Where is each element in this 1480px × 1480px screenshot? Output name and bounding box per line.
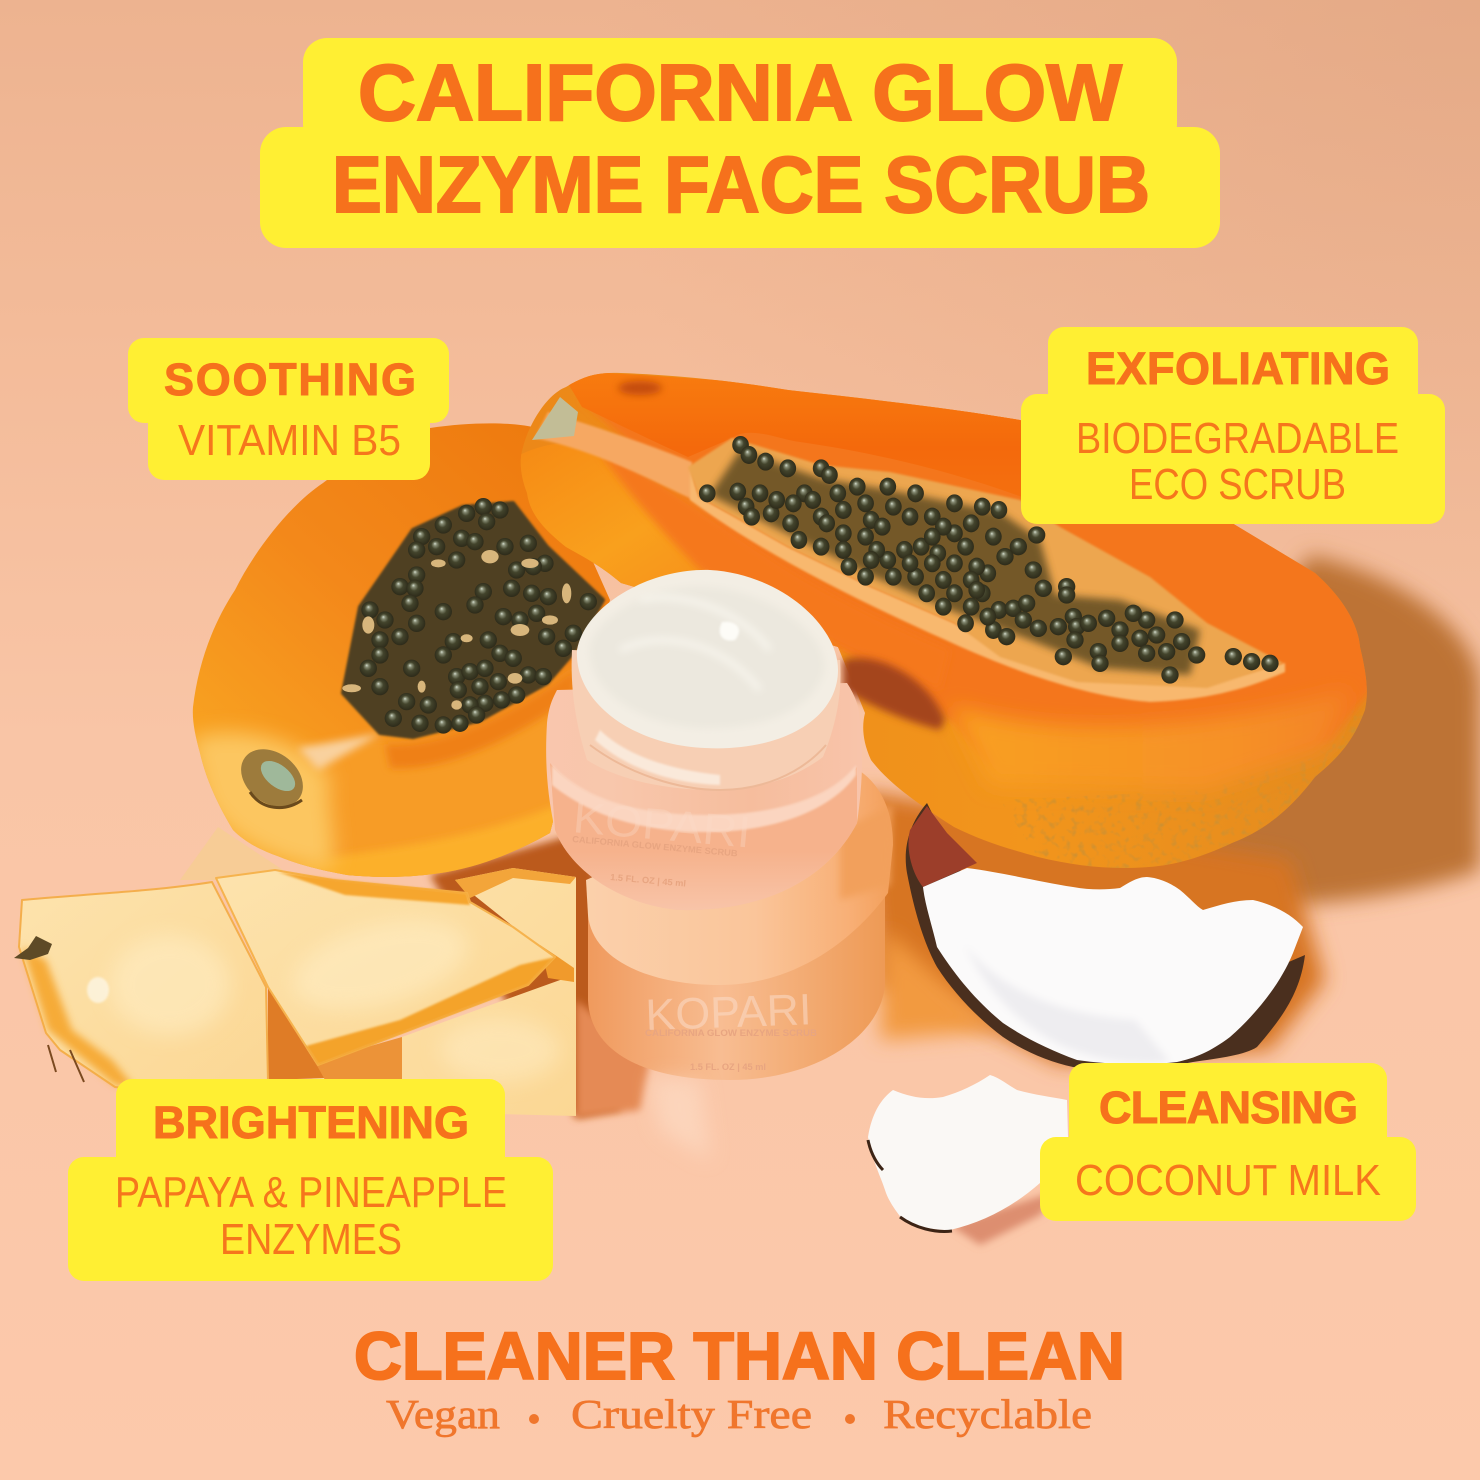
pineapple: back piece: [180, 827, 283, 880]
callout: brightening: BRIGHTENING: [153, 1097, 469, 1148]
right papaya half: [515, 370, 1380, 868]
right papaya: cavity shadow: [710, 450, 1200, 675]
claims row: Vegan: [386, 1391, 500, 1437]
right papaya: cream band under cavity: [690, 470, 1285, 702]
left papaya: shaded details: [194, 670, 572, 877]
callout: cleansing: COCONUT MILK: [1075, 1156, 1381, 1205]
callout: exfoliating: BIODEGRADABLE: [1076, 414, 1399, 463]
coconut: shell: [906, 803, 1305, 1069]
callout: soothing: VITAMIN B5: [178, 416, 401, 465]
fruit shadows: [430, 555, 1480, 1245]
right papaya: shadow cast by jar: [843, 658, 945, 730]
jar: upper jar label: 1.5 FL. OZ | 45 ml: [610, 872, 686, 889]
left papaya: seed cavity: [343, 503, 603, 737]
claims row: Cruelty Free: [571, 1391, 812, 1437]
callout: exfoliating: EXFOLIATING: [1086, 343, 1390, 394]
pineapple wedges: [14, 827, 576, 1116]
right papaya: shaded flesh: [515, 370, 1380, 790]
jar: lower jar label: [645, 985, 818, 1072]
right papaya: pale band: [535, 412, 694, 500]
callout: exfoliating: [1021, 327, 1445, 524]
callout: soothing: SOOTHING: [164, 354, 416, 405]
right papaya: stem wedge: [532, 397, 578, 440]
right papaya: lower inner flesh: [604, 460, 785, 594]
callout: brightening: PAPAYA & PINEAPPLE: [115, 1168, 507, 1217]
callout: cleansing: [1040, 1063, 1416, 1221]
jar: upper jar body: [546, 683, 862, 910]
title: line 2: ENZYME FACE SCRUB: [332, 140, 1150, 229]
jar: lower jar label: CALIFORNIA GLOW ENZYME SCRUB: [645, 1028, 818, 1038]
callout: soothing: [128, 338, 449, 480]
right papaya: left lobe: [515, 443, 845, 650]
jar: lower jar body: [588, 885, 885, 1080]
jar: upper jar label: KOPARI: [571, 793, 753, 857]
jar: lower body tint: [550, 763, 857, 910]
jar: lower jar label: KOPARI: [645, 985, 812, 1040]
jar: upper jar label: CALIFORNIA GLOW ENZYME SCRUB: [572, 834, 739, 859]
callout: exfoliating: ECO SCRUB: [1129, 460, 1346, 509]
left papaya half: [190, 423, 610, 890]
right papaya: seed cavity: [688, 438, 1283, 688]
pineapple: orange gap: [268, 988, 325, 1080]
claims row: Recyclable: [883, 1391, 1092, 1437]
jar: cream: [577, 570, 838, 748]
right papaya: upper flesh band: [560, 370, 1030, 500]
left papaya: stem end: [230, 737, 314, 819]
title: [260, 38, 1220, 248]
right papaya: yellow rim of flesh: [950, 690, 1350, 790]
coconut: white meat: [923, 868, 1303, 1064]
coconut: red inner husk: [908, 806, 977, 887]
title: yellow plate: [260, 38, 1220, 248]
pineapple: middle wedge: [216, 870, 555, 1065]
pineapple: left wedge: [19, 882, 268, 1090]
right papaya: skin speckle: [1000, 700, 1365, 868]
jar: light band: [552, 765, 856, 832]
tagline: CLEANER THAN CLEAN: [354, 1319, 1125, 1394]
jar: upper jar label: [571, 793, 753, 889]
jar: reflection: [650, 1078, 710, 1160]
right papaya: seeds, right end: [996, 526, 1279, 684]
left papaya: flesh: [193, 423, 610, 877]
right papaya: skin: [521, 373, 1367, 868]
callout: cleansing: CLEANSING: [1099, 1082, 1358, 1133]
right papaya: flesh base: [596, 407, 1367, 739]
small coconut piece: [868, 1075, 1068, 1231]
pineapple: eye: [14, 936, 52, 960]
claims row: [386, 1391, 1092, 1437]
left papaya: seeds: [342, 498, 597, 734]
callout: brightening: [68, 1079, 553, 1281]
product jars: [546, 570, 893, 1160]
pineapple: right wedge: [310, 868, 576, 1116]
coconut piece in shell: [906, 803, 1305, 1069]
jar: peach lid: [586, 765, 893, 985]
jar: inner neck: [572, 650, 840, 790]
right papaya: seeds: [699, 436, 1007, 639]
callout: brightening: ENZYMES: [220, 1215, 402, 1264]
jar: lower jar label: 1.5 FL. OZ | 45 ml: [690, 1062, 766, 1072]
title: line 1: CALIFORNIA GLOW: [358, 48, 1122, 137]
